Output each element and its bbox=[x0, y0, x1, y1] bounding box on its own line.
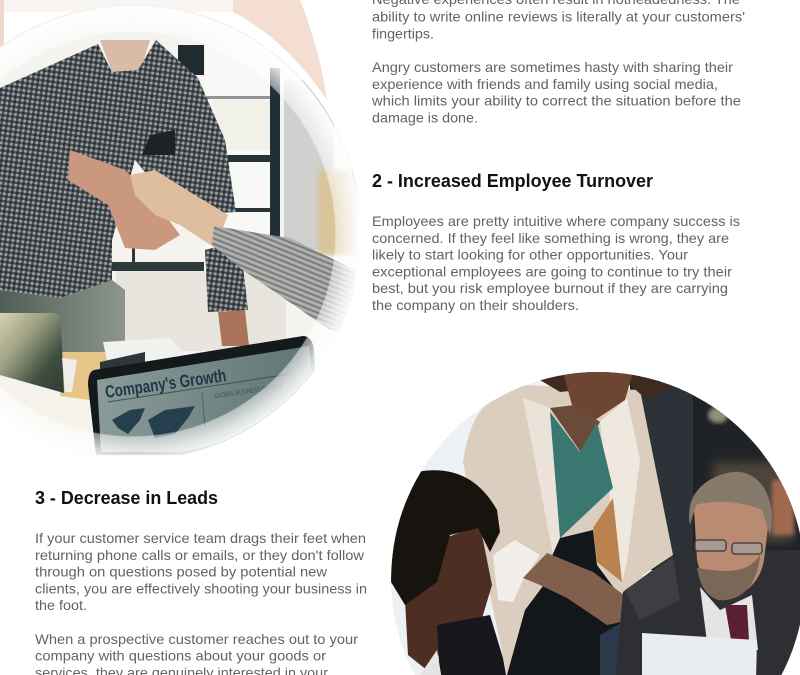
text block: continuation of section 1: experience with friends and family using social media, bbox=[372, 76, 718, 92]
text block: employee turnover: the company on their shoulders. bbox=[372, 297, 579, 313]
text block: employee turnover: Employees are pretty intuitive where company success is bbox=[372, 213, 740, 229]
standing woman bbox=[463, 372, 673, 675]
translucent white ring of the circle frame bbox=[0, 6, 361, 462]
text block: decrease in leads: When a prospective customer reaches out to your bbox=[35, 631, 358, 647]
text block: decrease in leads: If your customer service team drags their feet when bbox=[35, 530, 366, 546]
tablet: Company's Growth bbox=[88, 336, 316, 455]
photo: handshake in circular frame bbox=[0, 0, 365, 462]
shaking hands and striped sleeve bbox=[130, 170, 355, 332]
photo: faded foreground figure behind the circle bbox=[0, 0, 327, 100]
text block: decrease in leads: company with questions about your goods or bbox=[35, 648, 326, 664]
text block: employee turnover: best, but you risk employee burnout if they are carrying bbox=[372, 280, 728, 296]
room background bbox=[385, 365, 800, 675]
heading: 2 - Increased Employee Turnover: 2 - Increased Employee Turnover bbox=[372, 171, 653, 191]
text block: employee turnover: exceptional employees are going to continue to try their bbox=[372, 263, 732, 279]
tablet world map bbox=[112, 406, 195, 438]
text block: continuation of section 1: which limits your ability to correct the situation before the bbox=[371, 92, 741, 108]
text block: decrease in leads: through on questions posed by potential new bbox=[35, 564, 328, 580]
photo: three colleagues reviewing a document in circular frame bbox=[385, 365, 800, 675]
document held by the man bbox=[642, 633, 757, 675]
window and room background bbox=[0, 0, 365, 460]
text block: decrease in leads: the foot. bbox=[35, 597, 87, 613]
text block: employee turnover: likely to start looking for other opportunities. Your bbox=[372, 247, 688, 263]
tablet sub-heading: GLOBAL BUSINESS REPORT bbox=[214, 384, 283, 400]
text block: decrease in leads: returning phone calls or emails, or they don't follow bbox=[35, 547, 365, 563]
text block: continuation of section 1: fingertips. bbox=[372, 25, 434, 41]
text block: continuation of section 1: damage is done. bbox=[372, 109, 478, 125]
laptop and desk bbox=[0, 313, 181, 400]
heading: 3 - Decrease in Leads: 3 - Decrease in Leads bbox=[35, 488, 218, 508]
text block: continuation of section 1: Angry customers are sometimes hasty with sharing their bbox=[372, 59, 733, 75]
text block: employee turnover bbox=[372, 213, 740, 313]
text block: decrease in leads: clients, you are effectively shooting your business in bbox=[35, 580, 367, 596]
text block: employee turnover: concerned. If they feel like something is wrong, they are bbox=[372, 230, 729, 246]
seated woman bbox=[391, 470, 507, 675]
text block: continuation of section 1 bbox=[371, 0, 745, 125]
man in checked shirt bbox=[0, 40, 249, 352]
text block: decrease in leads bbox=[35, 530, 367, 675]
seated man bbox=[615, 472, 800, 675]
pointing arm bbox=[523, 553, 631, 625]
tablet headline: Company's Growth bbox=[104, 365, 227, 402]
text block: continuation of section 1: ability to write online reviews is literally at your customers' bbox=[372, 8, 745, 24]
